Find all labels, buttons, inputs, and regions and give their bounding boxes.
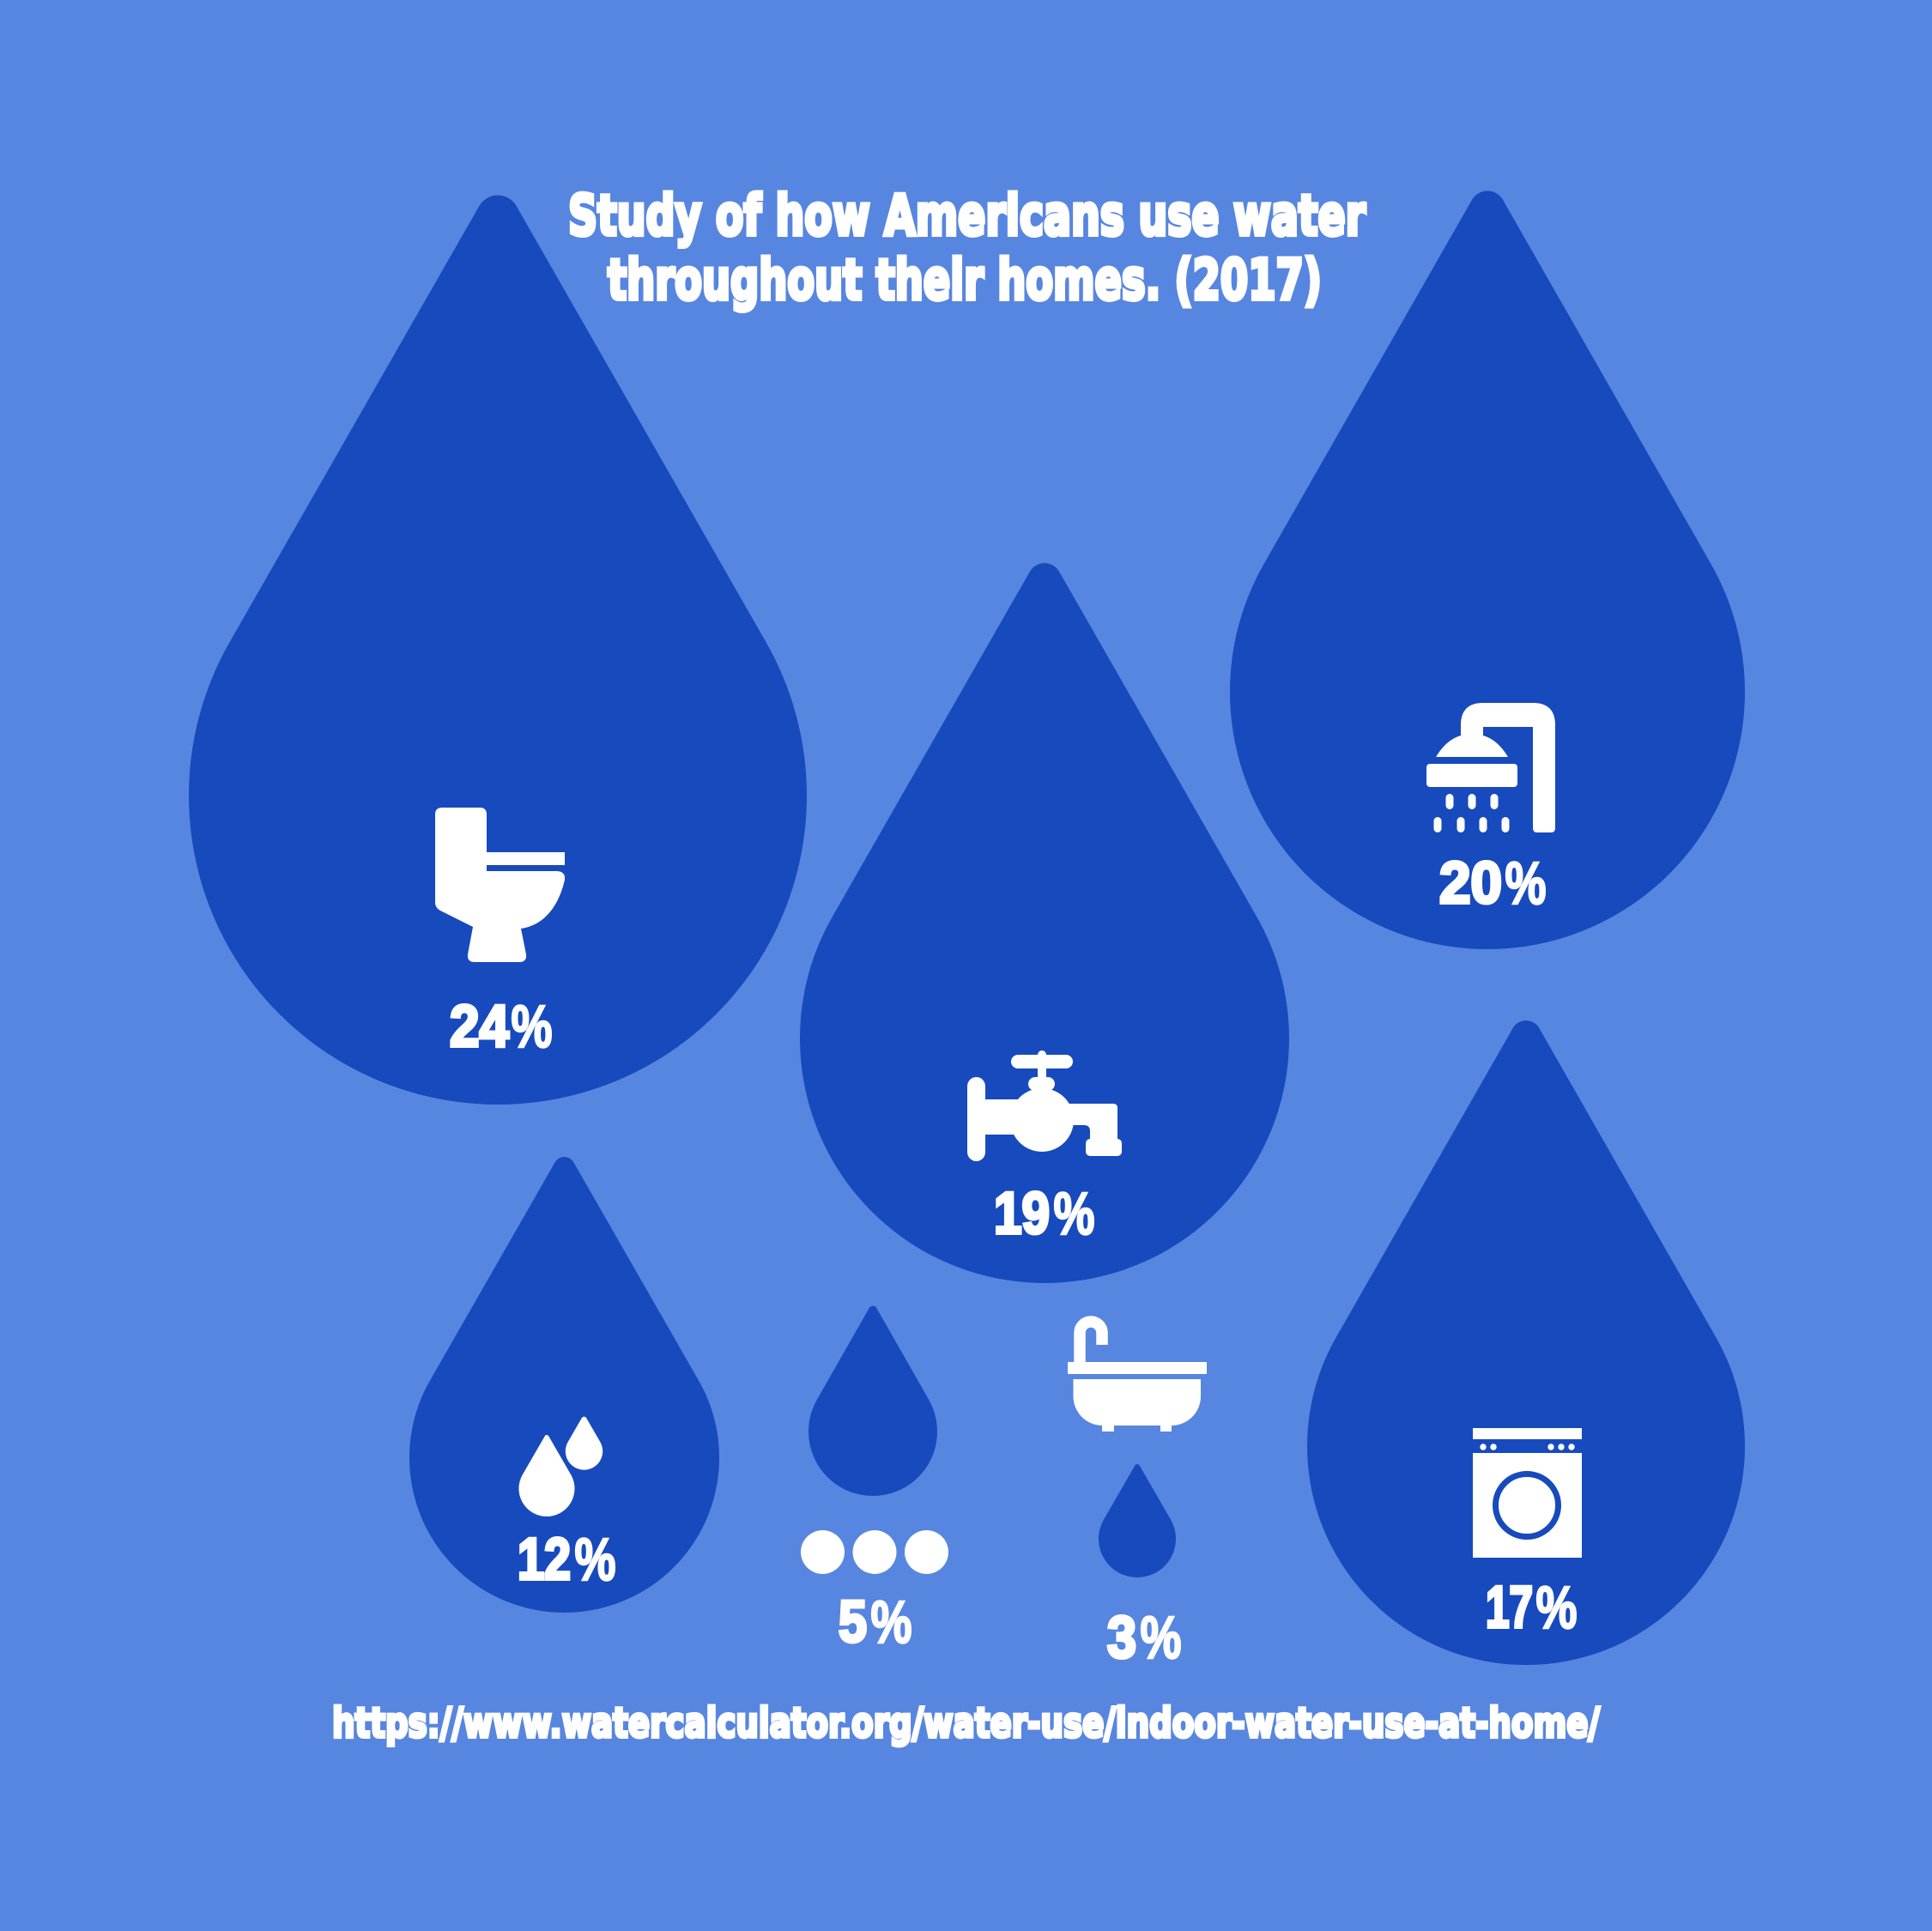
label: 19%: %: [1054, 1180, 1095, 1247]
label: 24%: 24: [450, 993, 509, 1059]
label: 20%: 20: [1439, 850, 1502, 916]
drop: bathtub: [1099, 1464, 1176, 1577]
label: 17%: 17: [1486, 1574, 1533, 1640]
label: 19%: [994, 1180, 1095, 1247]
label: 24%: %: [512, 993, 553, 1060]
drop: other: [809, 1306, 937, 1496]
label: 3%: 3: [1107, 1604, 1136, 1670]
source url: https://www.watercalculator.org/water-use/indoor-water-use-at-home/: [332, 1699, 1600, 1747]
drop: washing machine: [1307, 1020, 1745, 1665]
label: 3%: [1107, 1604, 1181, 1671]
label: 5%: 5: [839, 1589, 867, 1655]
panel: other 5%: [801, 1306, 948, 1656]
panel: washing machine 17%: [1307, 1020, 1745, 1665]
label: 20%: [1439, 850, 1547, 917]
drop: faucet: [800, 563, 1289, 1283]
label: 17%: %: [1536, 1574, 1578, 1641]
title: [568, 184, 1366, 312]
title: Study of how Americans use water: [568, 184, 1366, 249]
icon: three dots: [801, 1530, 948, 1574]
icon: shower: [1426, 703, 1555, 832]
label: 12%: 12: [518, 1526, 571, 1592]
drop: toilet: [189, 195, 807, 1105]
icon: washing machine: [1473, 1428, 1582, 1558]
label: 19%: 19: [994, 1180, 1050, 1246]
icon: bathtub: [1068, 1322, 1207, 1432]
panel: faucet 19%: [800, 563, 1289, 1283]
label: 20%: %: [1505, 850, 1547, 917]
drop: leaks: [409, 1157, 719, 1613]
label: 3%: %: [1140, 1604, 1181, 1671]
label: 24%: [450, 993, 553, 1060]
label: 5%: [839, 1589, 911, 1656]
panel: toilet 24%: [189, 195, 807, 1105]
panel: bathtub 3%: [1068, 1322, 1207, 1671]
icon: toilet: [435, 808, 565, 962]
panel: leaks 12%: [409, 1157, 719, 1613]
label: 5%: %: [870, 1589, 911, 1656]
icon: water drops: [518, 1417, 603, 1516]
icon: faucet: [967, 1050, 1122, 1161]
label: 12%: %: [575, 1526, 616, 1593]
label: 12%: [518, 1526, 616, 1593]
drop: shower: [1230, 191, 1745, 949]
title: throughout their homes. (2017): [608, 249, 1322, 312]
panel: shower 20%: [1230, 191, 1745, 949]
